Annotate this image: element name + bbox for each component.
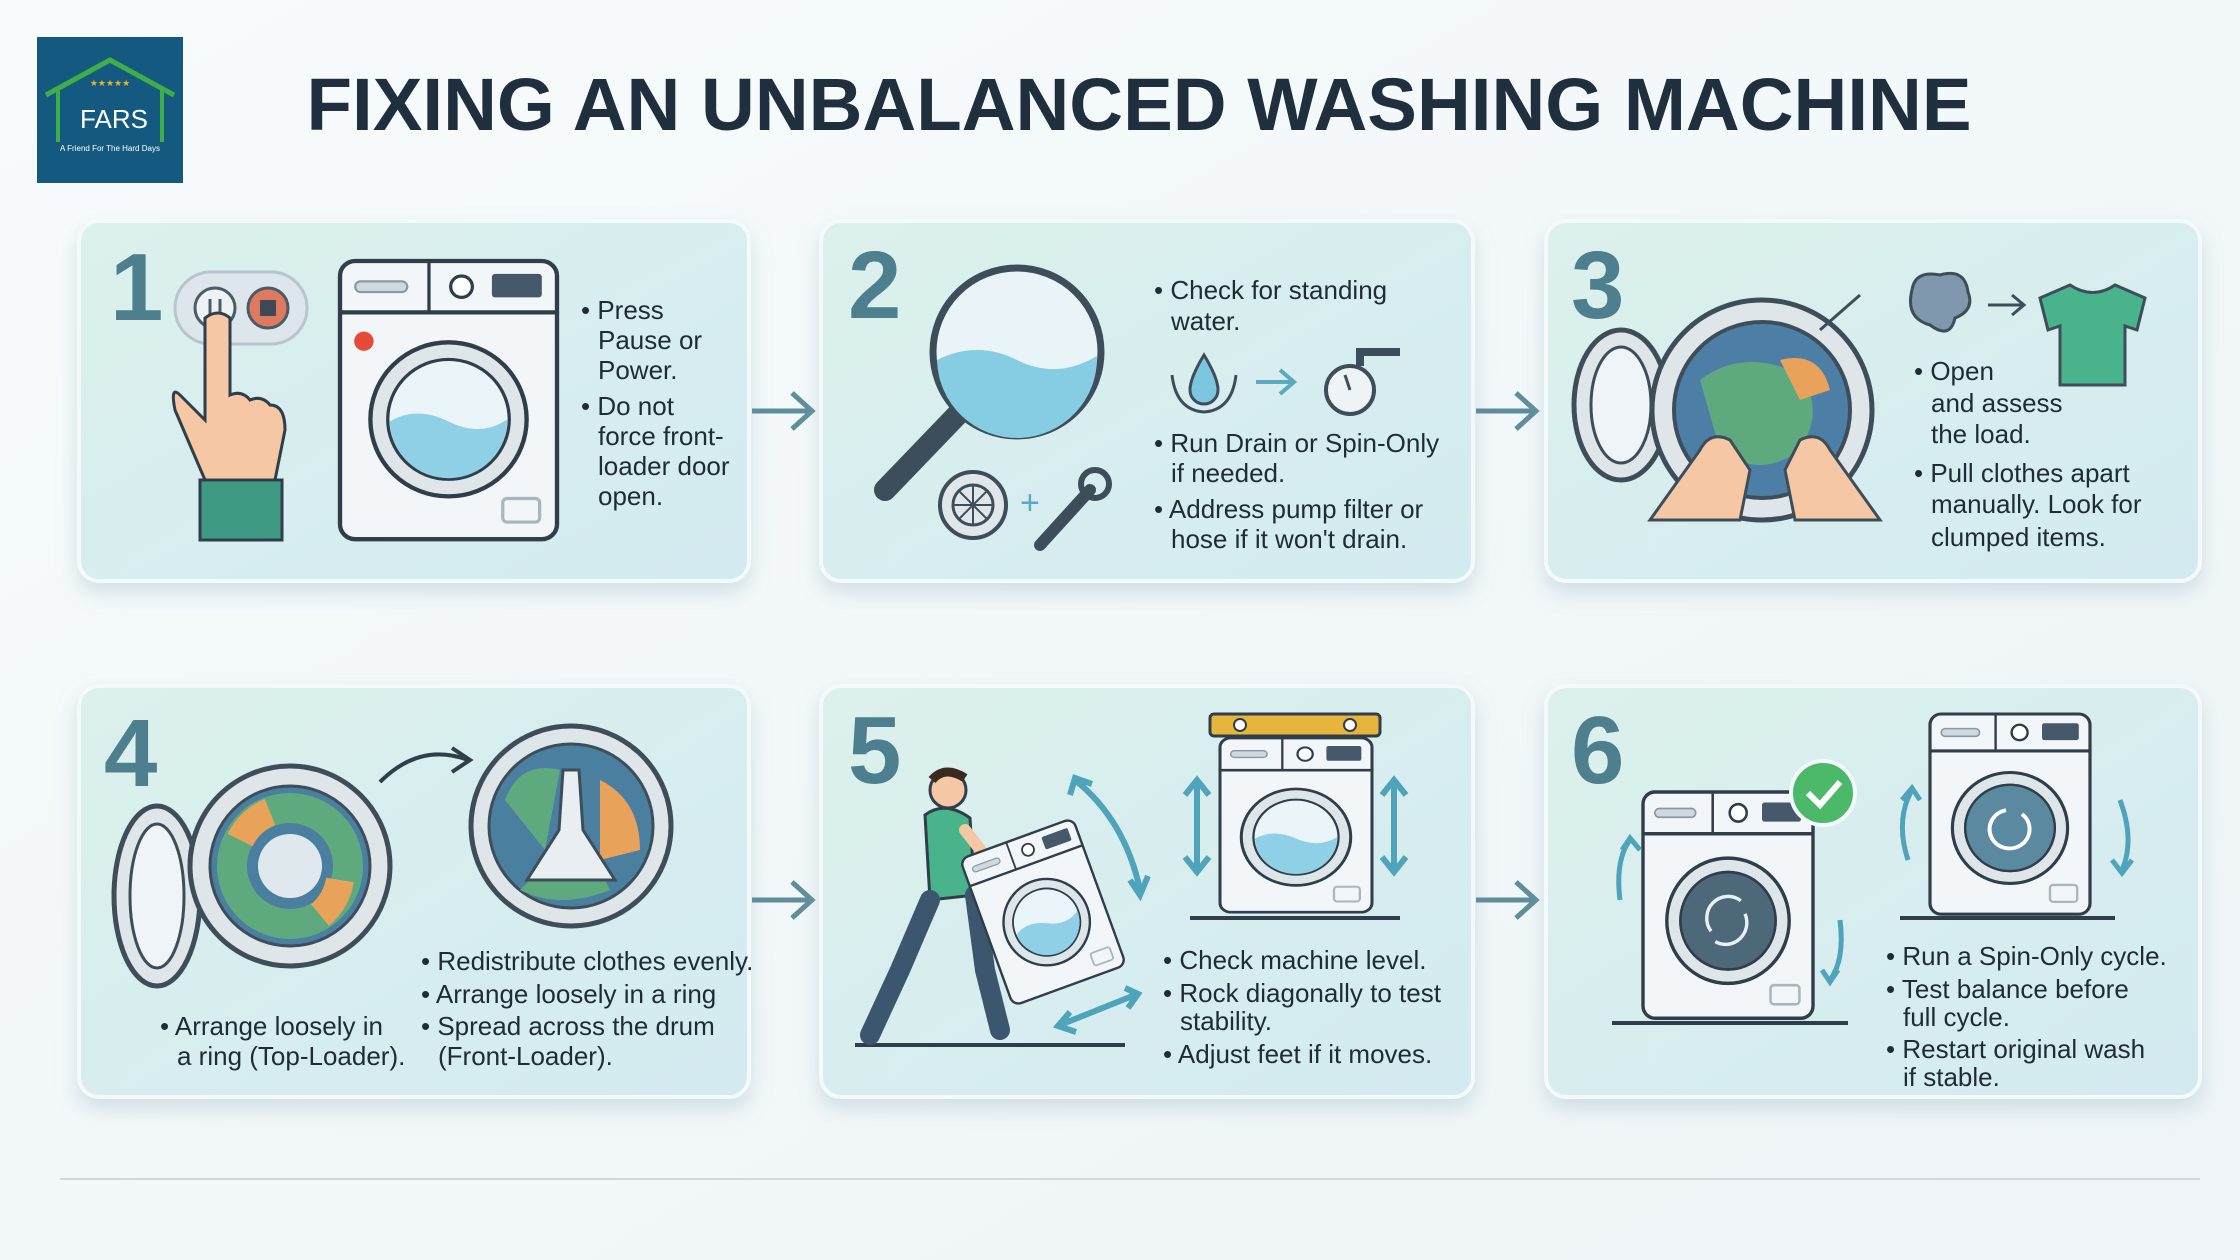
arrow 5 to 6 bbox=[1476, 882, 1536, 918]
text: step 2 bullets: if needed. bbox=[1171, 458, 1285, 488]
text: step 1 bullets: loader door bbox=[598, 451, 730, 481]
logo: A Friend For The Hard Days bbox=[60, 144, 160, 153]
text: step 4 bullets: • Redistribute clothes evenly. bbox=[421, 946, 753, 976]
icon: pump filter and wrench: + bbox=[1020, 484, 1040, 522]
text: step 2 bullets: • Check for standing bbox=[1154, 275, 1387, 305]
text: step 5 bullets: • Rock diagonally to test bbox=[1163, 978, 1442, 1008]
arrow 2 to 3 bbox=[1476, 393, 1536, 429]
text: step 2 bullets: • Run Drain or Spin-Only bbox=[1154, 428, 1439, 458]
illustration: washing machine bbox=[340, 261, 557, 539]
text: step 5 bullets: • Adjust feet if it moves. bbox=[1163, 1039, 1432, 1069]
text: step 3 bullets: and assess bbox=[1931, 388, 2063, 418]
illustration: top-loader bbox=[471, 726, 671, 926]
text: step 1 bullets: force front- bbox=[598, 421, 724, 451]
icon: drop to pump bbox=[1172, 352, 1400, 414]
step number 6: 6 bbox=[1571, 697, 1624, 804]
logo bbox=[37, 37, 183, 183]
text: step 6 bullets bbox=[1886, 941, 2167, 1092]
illustration: open drum with hands bbox=[1574, 295, 1880, 520]
text: step 2 bullets: hose if it won't drain. bbox=[1171, 524, 1407, 554]
illustration: front-loader ring bbox=[114, 766, 390, 986]
icon: magnifying glass with water bbox=[885, 268, 1101, 490]
text: step 6 bullets: full cycle. bbox=[1903, 1002, 2010, 1032]
text: step 6 bullets: if stable. bbox=[1903, 1062, 2000, 1092]
text: step 6 bullets: • Run a Spin-Only cycle. bbox=[1886, 941, 2167, 971]
arrow 1 to 2 bbox=[752, 393, 812, 429]
step number 5: 5 bbox=[848, 697, 901, 804]
arrow: curved bbox=[380, 748, 470, 782]
text: step 3 bullets: the load. bbox=[1931, 419, 2031, 449]
text: step 6 bullets: • Test balance before bbox=[1886, 974, 2129, 1004]
icon: hand pressing pause bbox=[173, 272, 307, 540]
illustration: spinning machine bbox=[1900, 714, 2132, 918]
text: step 5 bullets bbox=[1163, 945, 1442, 1069]
text: step 5 bullets: stability. bbox=[1180, 1006, 1272, 1036]
text: step 4 bullets: • Spread across the drum bbox=[421, 1011, 715, 1041]
step number 4: 4 bbox=[104, 700, 157, 807]
icon: clump to shirt bbox=[1910, 273, 2145, 385]
panel: step 2 bbox=[821, 221, 1473, 581]
text: step 1 bullets: • Do not bbox=[581, 391, 675, 421]
text: top-loader caption: a ring (Top-Loader). bbox=[177, 1041, 405, 1071]
text: step 3 bullets: • Pull clothes apart bbox=[1914, 458, 2131, 488]
text: step 2 bullets: water. bbox=[1170, 306, 1240, 336]
title: FIXING AN UNBALANCED WASHING MACHINE bbox=[306, 63, 1972, 146]
text: step 1 bullets: Pause or bbox=[598, 325, 702, 355]
text: step 1 bullets: • Press bbox=[581, 295, 664, 325]
text: top-loader caption bbox=[160, 1011, 405, 1071]
logo: FARS bbox=[80, 104, 148, 134]
text: step 3 bullets: manually. Look for bbox=[1931, 489, 2142, 519]
text: step 6 bullets: • Restart original wash bbox=[1886, 1034, 2145, 1064]
text: step 4 bullets: • Arrange loosely in a ring bbox=[421, 979, 716, 1009]
illustration: machine with checkmark bbox=[1612, 761, 1855, 1023]
step number 2: 2 bbox=[848, 232, 901, 339]
step number 1: 1 bbox=[110, 234, 163, 341]
text: step 3 bullets bbox=[1914, 356, 2142, 552]
illustration: level machine bbox=[1185, 714, 1406, 918]
text: step 1 bullets: open. bbox=[598, 481, 663, 511]
panel: step 4 bbox=[79, 686, 753, 1097]
text: step 3 bullets: • Open bbox=[1914, 356, 1994, 386]
panel: step 3 bbox=[1546, 221, 2200, 581]
illustration: person rocking tilted machine bbox=[855, 772, 1148, 1045]
step number 3: 3 bbox=[1571, 232, 1624, 339]
icon: pump filter and wrench bbox=[940, 470, 1109, 545]
panel: step 5 bbox=[821, 686, 1473, 1097]
arrow 4 to 5 bbox=[752, 882, 812, 918]
text: step 2 bullets: • Address pump filter or bbox=[1154, 494, 1424, 524]
panel: step 6 bbox=[1546, 686, 2200, 1097]
text: step 3 bullets: clumped items. bbox=[1931, 522, 2106, 552]
text: top-loader caption: • Arrange loosely in bbox=[160, 1011, 383, 1041]
logo: ★★★★★ bbox=[90, 78, 130, 88]
text: step 1 bullets bbox=[581, 295, 730, 511]
text: step 1 bullets: Power. bbox=[598, 355, 678, 385]
text: step 5 bullets: • Check machine level. bbox=[1163, 945, 1426, 975]
panel: step 1 bbox=[79, 221, 749, 581]
text: step 4 bullets bbox=[421, 946, 753, 1071]
text: step 2 bullets bbox=[1154, 275, 1439, 554]
text: step 4 bullets: (Front-Loader). bbox=[438, 1041, 613, 1071]
